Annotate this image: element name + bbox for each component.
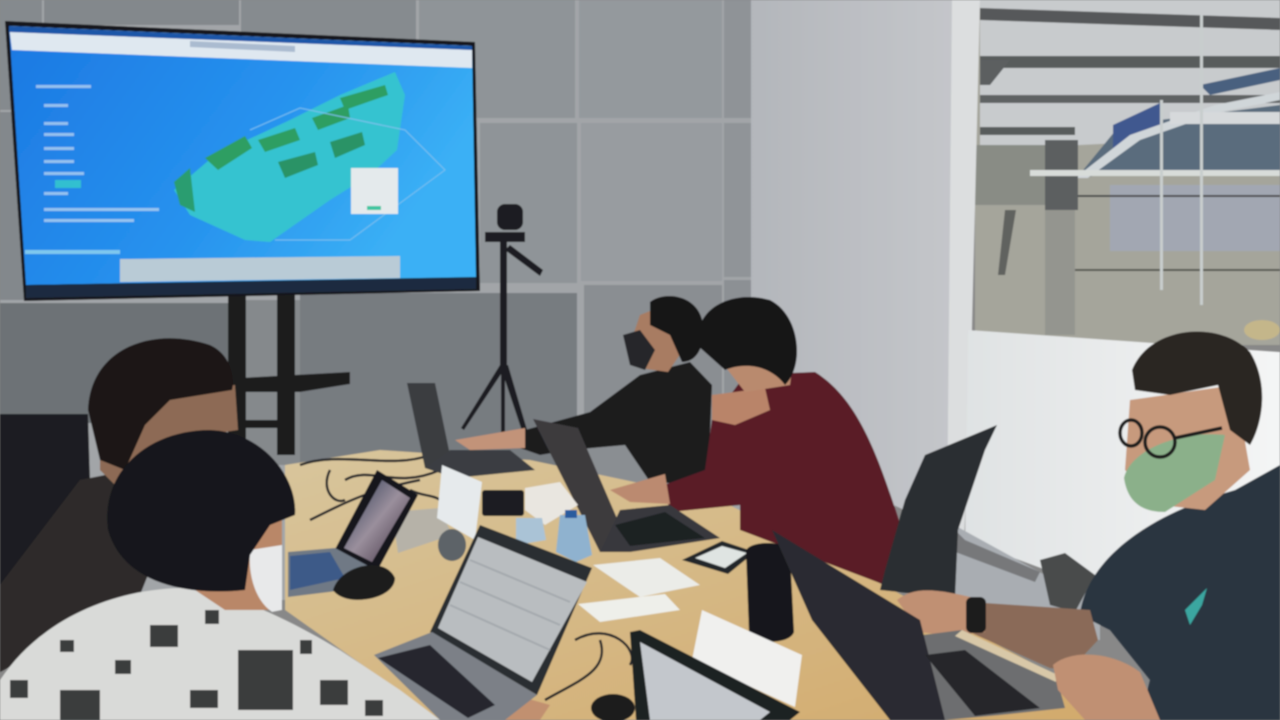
phone and papers — [482, 482, 755, 622]
person: right man in navy polo — [897, 331, 1280, 720]
toolbar — [120, 256, 400, 282]
laptop: front right — [772, 530, 1160, 720]
grey mug — [438, 529, 466, 561]
back-left dark chair — [0, 414, 90, 585]
watch — [966, 597, 986, 633]
cables — [300, 455, 632, 700]
right pillar — [751, 0, 955, 530]
paper tent cards — [437, 465, 482, 540]
laptop: left with colourful screen — [288, 470, 418, 600]
laptop: bottom center — [630, 630, 800, 720]
person: man in maroon shirt — [610, 297, 905, 585]
progress bar — [25, 250, 120, 254]
name card — [692, 610, 802, 707]
laptop: center grey — [533, 419, 720, 552]
wall panels — [0, 0, 760, 600]
laptop: back center — [407, 383, 535, 478]
window with outdoor view — [975, 0, 1280, 345]
person: left man dark shirt — [0, 338, 238, 672]
tv stand — [228, 295, 350, 455]
hand — [897, 590, 985, 636]
forearm — [965, 603, 1098, 670]
person: front man white patterned shirt — [0, 430, 550, 720]
power hub — [392, 508, 452, 553]
table — [285, 450, 1100, 720]
laptop: front center — [374, 525, 592, 720]
frosted glass — [965, 330, 1280, 600]
3d model — [174, 72, 445, 242]
black thermos — [746, 543, 794, 642]
dark device on sill — [1040, 553, 1095, 612]
window frame — [947, 0, 980, 545]
display screen — [5, 21, 480, 301]
water bottles — [516, 510, 592, 562]
dialog box — [351, 168, 398, 214]
mouse — [591, 694, 635, 720]
office chair — [880, 425, 997, 598]
window sill and lower wall — [940, 520, 1100, 640]
camera on tripod — [461, 204, 543, 440]
dark chair behind maroon man — [735, 415, 762, 475]
model tree — [36, 85, 159, 222]
person: center man in black shirt — [455, 296, 712, 485]
